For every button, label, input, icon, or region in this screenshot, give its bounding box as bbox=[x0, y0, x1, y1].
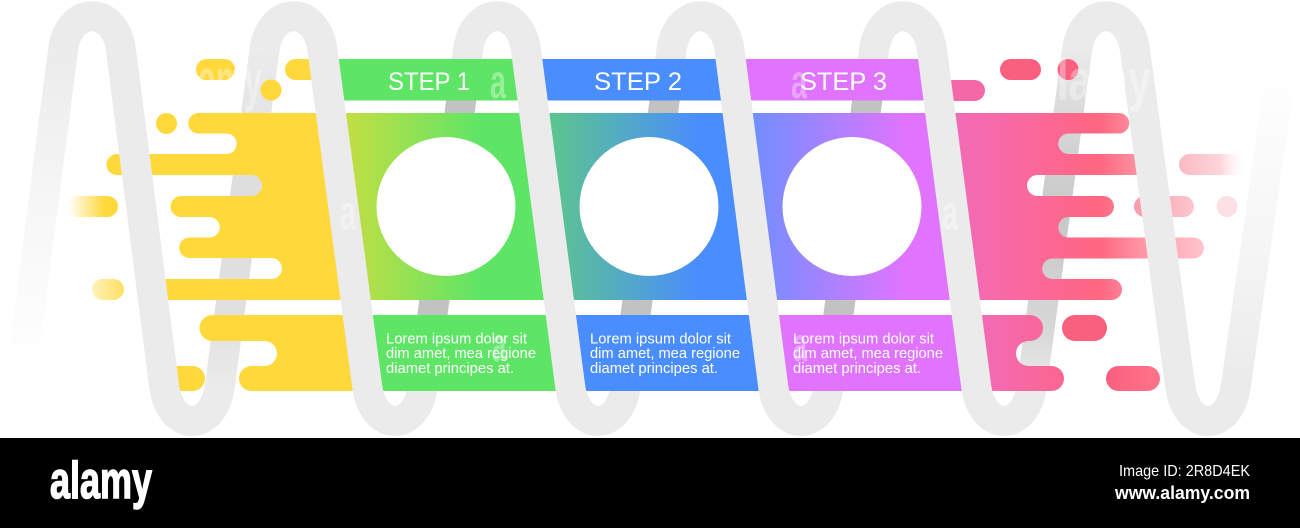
image id: Image ID: 2R8D4EK bbox=[1119, 463, 1250, 480]
step 1 text panel bbox=[358, 315, 570, 391]
step 1 body: diamet principes at. bbox=[386, 360, 514, 377]
pink main fingers bbox=[941, 113, 1204, 300]
step 1 circle bbox=[376, 137, 516, 276]
pink fading pill upper bbox=[1179, 154, 1249, 175]
step 2 title: STEP 2 bbox=[594, 68, 682, 96]
stock watermark glyphs: a bbox=[791, 56, 807, 109]
pink fading pill middle bbox=[1134, 196, 1194, 217]
step 3 text panel bbox=[764, 315, 976, 391]
step 2 body: dim amet, mea regione bbox=[590, 345, 740, 362]
yellow pill top bbox=[196, 59, 235, 80]
yellow pill under strand bbox=[285, 59, 325, 80]
panel: yellow splash start bbox=[66, 59, 368, 391]
stock watermark glyphs: a bbox=[492, 319, 506, 372]
stock watermark glyphs bbox=[198, 48, 1151, 372]
step 2 body: diamet principes at. bbox=[590, 360, 718, 377]
step 1 body: Lorem ipsum dolor sit bbox=[386, 330, 528, 348]
stock watermark glyphs: a bbox=[490, 56, 506, 109]
step 2 image band bbox=[535, 113, 762, 300]
panel: step 1 bbox=[323, 59, 570, 391]
website: www.alamy.com bbox=[1114, 483, 1250, 503]
pink stub beside step 3 header bbox=[936, 80, 985, 101]
pink fading dot bbox=[1216, 196, 1238, 217]
step 3 image band bbox=[738, 113, 964, 300]
step 3 body: dim amet, mea regione bbox=[793, 345, 943, 362]
step 1 title: STEP 1 bbox=[388, 68, 470, 96]
step 1 image band bbox=[331, 113, 558, 300]
step 3 body: Lorem ipsum dolor sit bbox=[793, 330, 935, 348]
panel: step 2 bbox=[528, 59, 774, 391]
step 1 body: dim amet, mea regione bbox=[386, 345, 536, 362]
step 3 title: STEP 3 bbox=[800, 68, 887, 96]
panel: step 3 bbox=[731, 59, 976, 391]
pink lower fingers bbox=[966, 315, 1064, 391]
yellow dot left bbox=[156, 113, 177, 134]
yellow fading pill lower bbox=[92, 279, 124, 300]
panel: pink splash end bbox=[936, 59, 1249, 391]
stock watermark glyphs: a bbox=[942, 187, 958, 240]
step 1 header bbox=[323, 59, 533, 100]
yellow lower fingers bbox=[200, 315, 368, 391]
stock watermark glyphs: amy bbox=[198, 48, 262, 113]
footer logo: alamy bbox=[50, 452, 152, 510]
step 2 body: Lorem ipsum dolor sit bbox=[590, 330, 732, 348]
coil: front strands bbox=[63, 16, 1208, 421]
step 3 circle bbox=[782, 137, 922, 276]
step 3 body: diamet principes at. bbox=[793, 360, 921, 377]
coil: rear rising strands and bottom arcs bbox=[20, 50, 1283, 421]
yellow dot upper bbox=[260, 80, 282, 100]
pink dot top bbox=[1058, 59, 1078, 80]
footer bar bbox=[0, 438, 1300, 528]
pink pill bottom bbox=[1106, 366, 1160, 391]
yellow lower stub bbox=[165, 366, 205, 391]
step 2 circle bbox=[580, 137, 718, 276]
pink pill top bbox=[1000, 59, 1041, 80]
stock watermark glyphs: lamy bbox=[1057, 48, 1151, 113]
stock watermark glyphs: a bbox=[340, 187, 356, 240]
pink pill lower bbox=[1062, 315, 1107, 341]
stock watermark glyphs: a bbox=[793, 319, 807, 372]
step 3 header bbox=[731, 59, 939, 100]
yellow fading pill bbox=[66, 196, 118, 217]
step 2 text panel bbox=[560, 315, 774, 391]
step 2 header bbox=[528, 59, 736, 100]
yellow main fingers bbox=[107, 113, 356, 300]
